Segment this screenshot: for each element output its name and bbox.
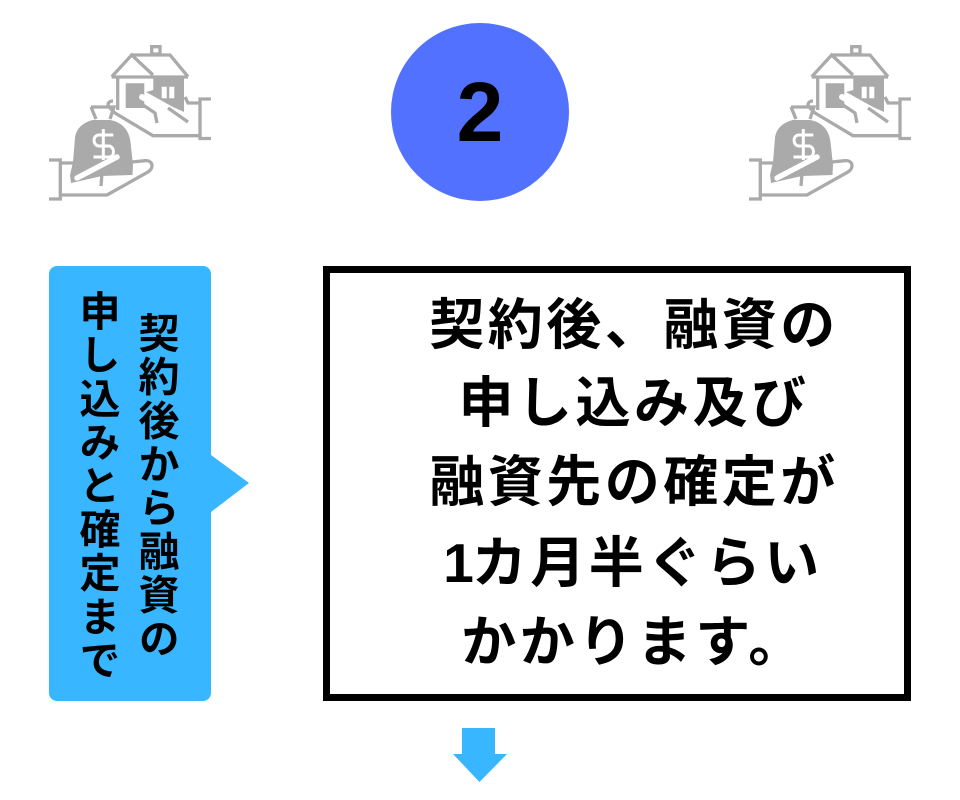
icon: money and house exchange, right [749,45,911,201]
main message text: 契約後、融資の [429,294,839,356]
main message text: 申し込み及び [458,372,810,434]
main message text: 1カ月半ぐらい [443,532,823,594]
main message text: かかります。 [461,611,807,673]
callout text column 1: 契約後から融資の [132,312,178,661]
callout text column 2: 申し込みと確定まで [73,290,119,682]
badge: step number 2 [391,23,569,201]
callout: vertical label with pointer [49,266,249,701]
icon: money and house exchange, left [49,45,211,201]
main message text: 融資先の確定が [429,451,839,513]
panel: main message box [323,266,911,701]
badge: step number 2: 2 [457,65,503,159]
arrow: down to next step [453,728,507,782]
callout shape [49,266,249,701]
